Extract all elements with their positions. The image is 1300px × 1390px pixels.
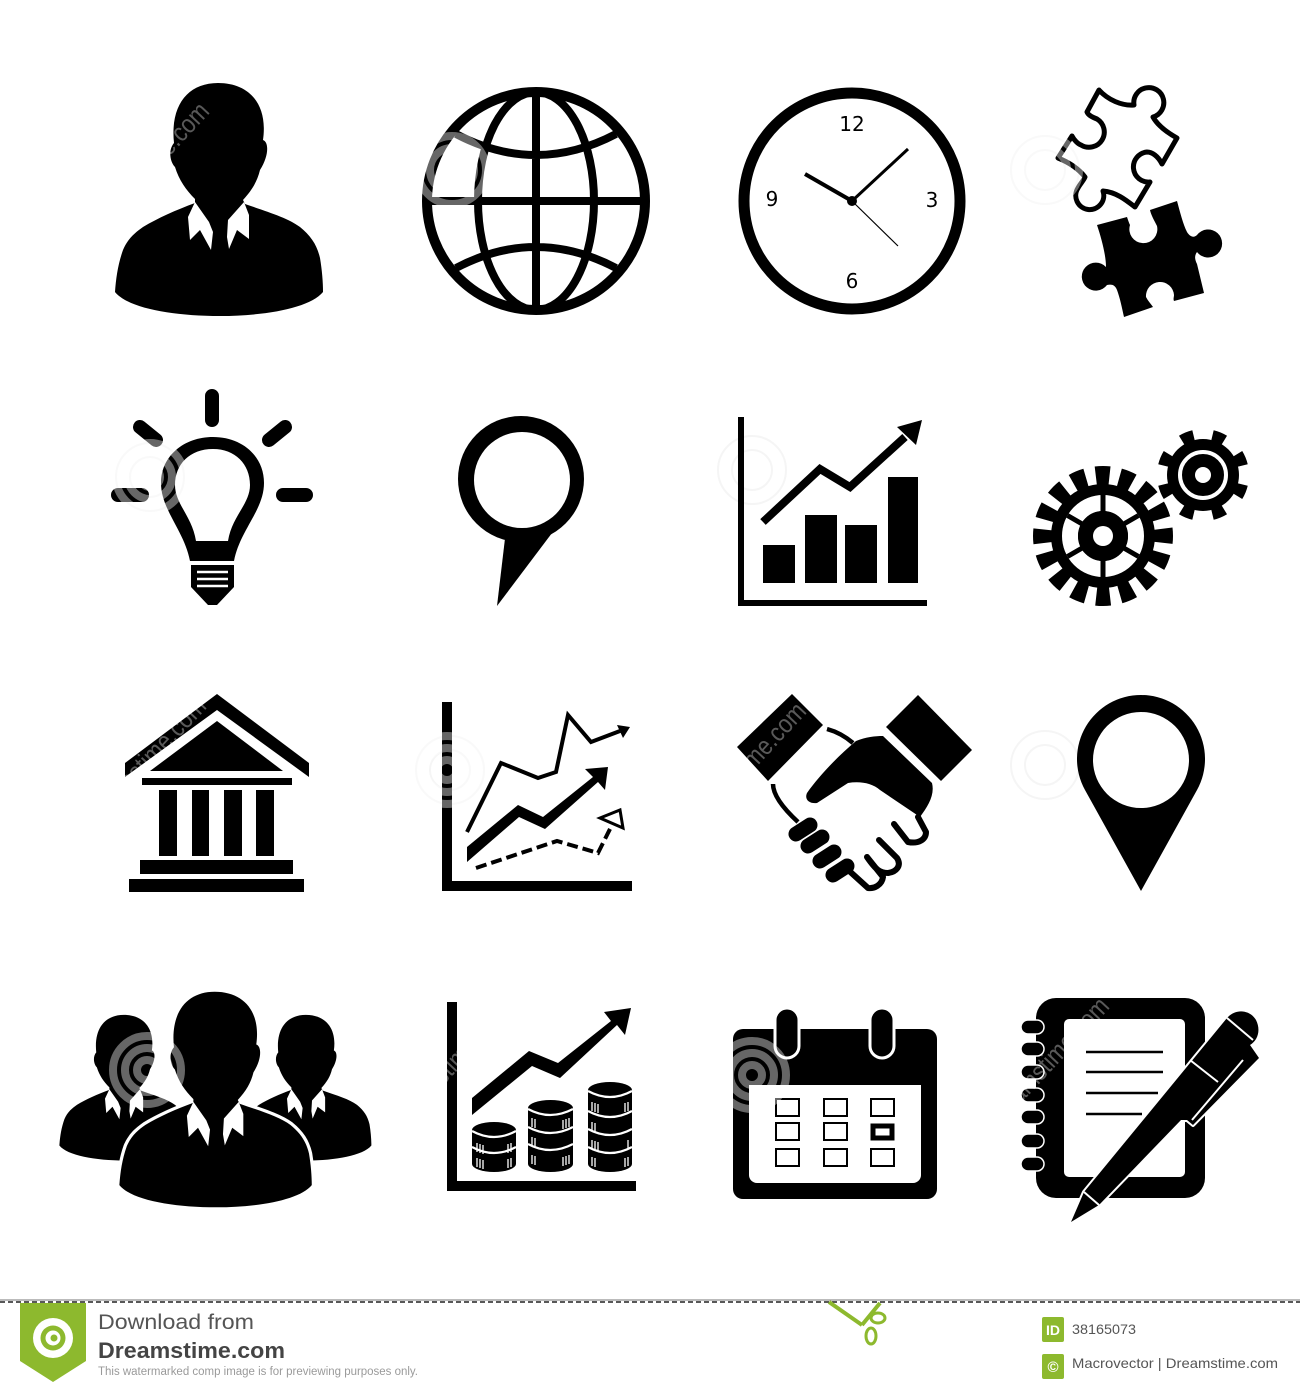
watermark text over icons: dreamstime.com [77,691,212,832]
icon: businessman [115,83,323,316]
icon: light bulb [118,396,306,605]
footer text: download from: Download from [98,1311,254,1334]
icon: map pin [1077,695,1205,891]
icon: wall clock: 9 [766,187,778,211]
icon: team of three [59,992,371,1207]
icon: wall clock: 6 [846,269,858,293]
badge: image id: ID [1046,1322,1060,1338]
footer text: disclaimer: This watermarked comp image is for previewing purposes only. [98,1366,418,1378]
watermark spirals over icons [113,136,1079,1109]
footer text: dreamstime: Dreamstime.com [98,1338,285,1363]
icon: handshake [737,694,972,888]
badge: copyright: © [1047,1359,1059,1376]
faint watermark under icons [116,136,1079,804]
icon: wall clock: 3 [926,188,938,212]
watermark text over icons [77,96,1115,1136]
person: centre [119,992,312,1207]
icon: bank building [125,694,309,892]
chart with coin stacks and rising arrow [447,1002,636,1191]
bar chart with rising arrow [738,417,927,606]
icon: globe [427,92,645,310]
icon: wall clock: 12 [839,112,865,136]
person: left [59,1015,189,1160]
watermark text over icons: dreamstime.com [382,995,517,1136]
icon: puzzle pieces [1058,88,1222,317]
text: author credit: Macrovector | Dreamstime.com [1072,1355,1278,1371]
footer ribbon logo [20,1303,86,1382]
watermark text over icons: dreamstime.com [80,96,215,237]
footer cut lines [0,1300,1300,1302]
watermark text over icons: dreamstime.com [980,991,1115,1132]
watermark text over icons: dreamstime.com [980,395,1115,536]
watermark text over icons: dreamstime.com [677,696,812,837]
text: image id number: 38165073 [1072,1321,1136,1337]
icon: round map pin [458,416,584,606]
person: right [241,1015,371,1160]
icon: notebook and pen [1021,998,1259,1222]
badge: copyright [1042,1354,1064,1379]
line chart with three arrows [442,702,632,891]
icon: green scissors [829,1302,885,1344]
badge: image id [1042,1317,1064,1342]
icon: wall clock [744,93,960,309]
icon: gears [1043,435,1243,596]
icon: calendar [733,1008,937,1199]
